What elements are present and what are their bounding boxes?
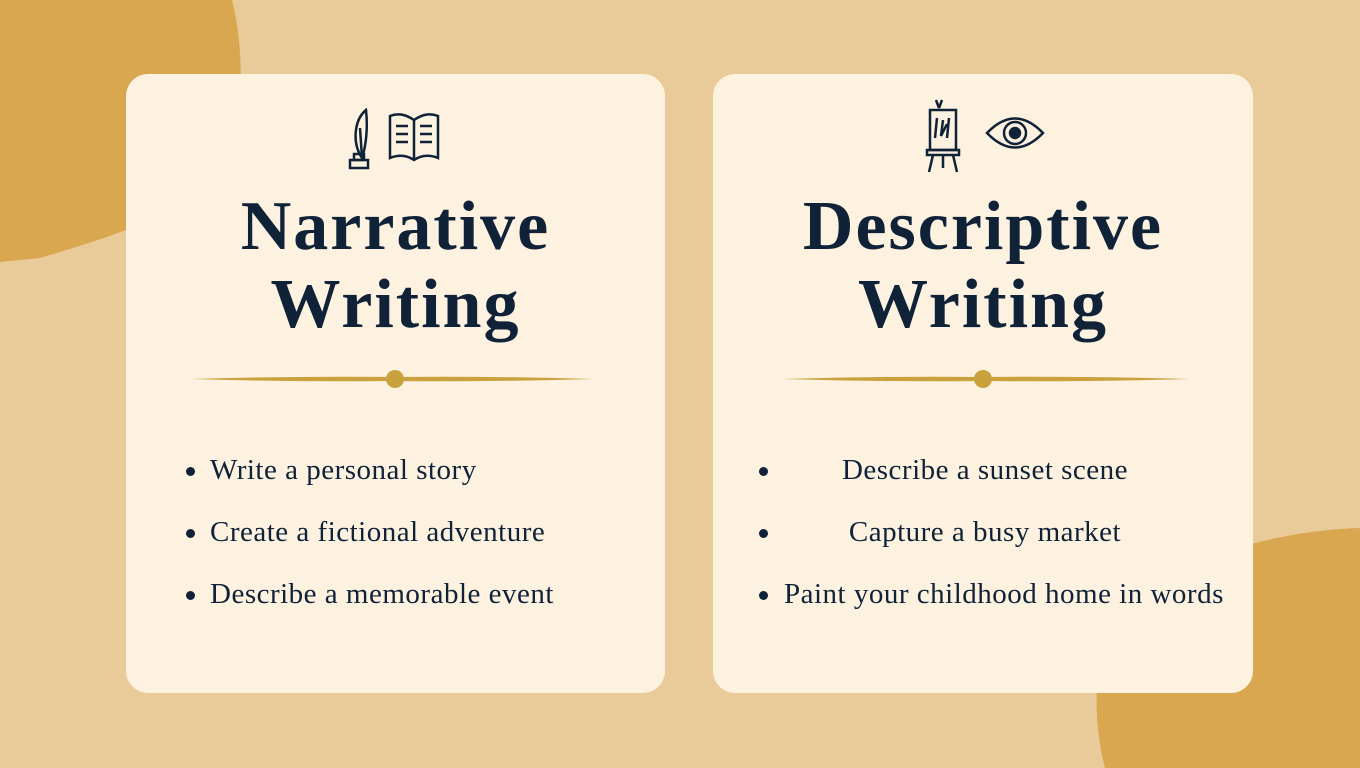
divider bbox=[193, 370, 593, 388]
panel: descriptive writing bbox=[713, 74, 1253, 693]
panel: descriptive writing: Capture a busy market bbox=[849, 516, 1121, 548]
panel: narrative writing: Describe a memorable event bbox=[210, 578, 554, 610]
background blob bottom-right bbox=[1096, 528, 1360, 768]
bullet list bbox=[186, 454, 554, 610]
panel: descriptive writing: Describe a sunset scene bbox=[842, 454, 1128, 486]
divider bbox=[784, 370, 1188, 388]
panel: narrative writing: Create a fictional adventure bbox=[210, 516, 545, 548]
title: Writing bbox=[271, 266, 520, 343]
title: Descriptive bbox=[803, 188, 1163, 265]
panel: narrative writing bbox=[126, 74, 665, 693]
title: Narrative bbox=[241, 188, 550, 265]
panel: descriptive writing: Paint your childhood home in words bbox=[784, 578, 1224, 610]
background blob top-left bbox=[0, 0, 241, 262]
icons: quill and book bbox=[348, 108, 440, 170]
icons: easel and eye bbox=[926, 100, 1045, 172]
panel: narrative writing: Write a personal story bbox=[210, 454, 477, 486]
title: Writing bbox=[858, 266, 1108, 343]
title bbox=[241, 188, 550, 343]
title bbox=[803, 188, 1163, 343]
bullet list bbox=[759, 454, 1224, 610]
